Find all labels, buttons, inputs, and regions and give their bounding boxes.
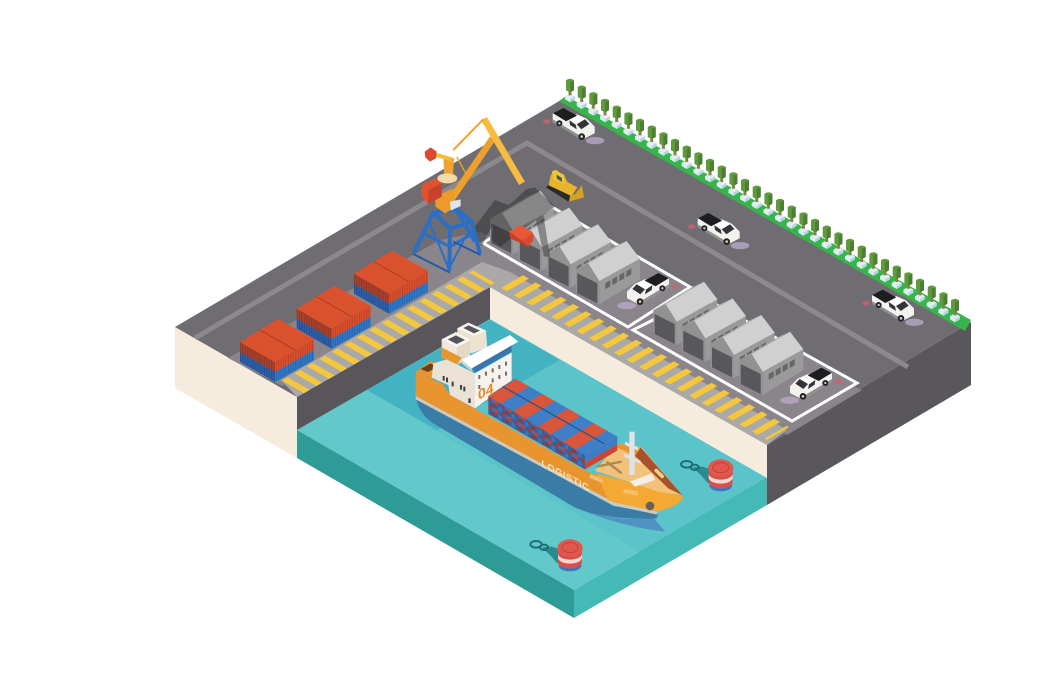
ship funnels xyxy=(442,323,487,365)
ship number 04: 04 xyxy=(478,381,494,404)
warehouses: upper row xyxy=(490,191,640,304)
pickup trucks xyxy=(543,108,924,404)
right dark wall of platform xyxy=(767,322,971,505)
dock inner walls xyxy=(297,287,767,478)
green hedge strip xyxy=(559,96,971,331)
parking lot outline: lower xyxy=(633,290,857,421)
water basin xyxy=(297,318,767,618)
striped loading zone: left xyxy=(281,262,510,397)
ship underwater hull xyxy=(416,395,665,532)
ship container load xyxy=(488,378,617,469)
crane shadow xyxy=(473,187,555,257)
ship stern deck xyxy=(416,361,443,378)
port crane xyxy=(413,119,522,273)
hanging red container xyxy=(509,225,533,247)
crane mast and boom xyxy=(431,119,522,213)
ship hull side xyxy=(416,372,683,511)
buoy: bottom xyxy=(530,539,583,571)
striped loading zone: right xyxy=(490,272,789,445)
ship mast xyxy=(624,432,641,475)
bulldozer xyxy=(546,170,584,202)
cargo ship xyxy=(416,323,683,532)
ship bow xyxy=(589,443,683,511)
tree row xyxy=(565,79,960,322)
crane red counterweights xyxy=(422,147,442,204)
parking lot outline: upper xyxy=(483,203,690,327)
warehouses: lower row xyxy=(653,282,803,395)
left cream side of platform xyxy=(175,327,297,458)
container stacks on quay xyxy=(240,251,428,382)
ship superstructure xyxy=(432,335,518,408)
crane blue portal frame xyxy=(413,209,481,273)
port yard surface xyxy=(175,100,971,445)
buoy: right xyxy=(681,459,733,491)
ship name LOGISTIC: LOGISTIC xyxy=(541,458,589,494)
